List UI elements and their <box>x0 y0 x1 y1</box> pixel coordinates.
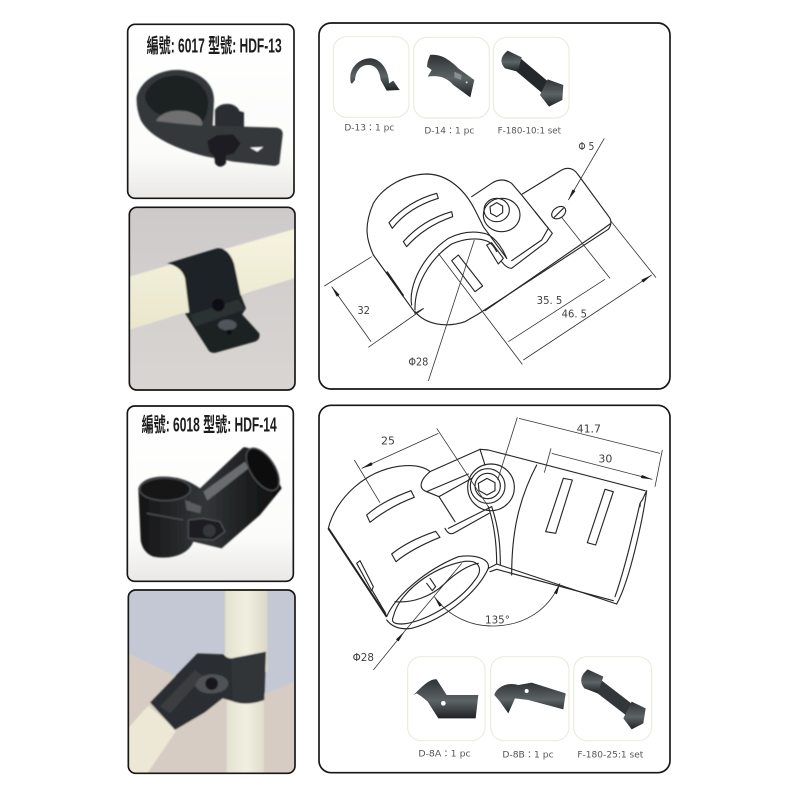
icon: HDF-14 elbow photo <box>138 443 286 558</box>
thumbnail: D-8B part <box>491 657 569 741</box>
dimension: 32: 32 <box>357 305 370 317</box>
panel: HDF-14 technical drawing <box>319 405 670 773</box>
dimension: 30: 30 <box>598 454 612 466</box>
title: HDF-13 model number: 編號: 6017 型號: HDF-13 <box>147 34 282 57</box>
panel: HDF-14 installed on pipes photo <box>125 587 298 777</box>
dimension: 135 degrees: 135° <box>485 614 510 626</box>
dimension: phi 28: Φ28 <box>408 356 428 368</box>
panel: HDF-13 product photo <box>128 24 294 198</box>
icon: HDF-13 clamp photo <box>137 70 283 167</box>
icon: pipes joined by HDF-14 elbow <box>125 587 298 777</box>
dimension: 46.5: 46. 5 <box>562 308 587 320</box>
label: D-13: D-13：1 pc <box>344 124 395 134</box>
panel: HDF-13 installed on pipe photo <box>127 207 297 390</box>
thumbnail: D-8A part <box>408 657 485 741</box>
label: F-180-25: F-180-25:1 set <box>577 751 644 761</box>
dimension: phi 5: Φ 5 <box>578 141 594 153</box>
label: F-180-10: F-180-10:1 set <box>498 126 562 136</box>
label: D-8B: D-8B：1 pc <box>502 751 554 761</box>
panel: HDF-13 technical drawing <box>319 23 670 389</box>
thumbnail: F-180-10 bolt <box>493 37 569 118</box>
dimension: 41.7: 41.7 <box>577 423 601 435</box>
panel: HDF-14 product photo <box>127 406 293 581</box>
dimension: phi 28: Φ28 <box>353 652 374 664</box>
thumbnail: F-180-25 bolt <box>574 657 652 741</box>
title: HDF-14 model number: 編號: 6018 型號: HDF-14 <box>142 414 277 437</box>
thumbnail: D-14 part <box>414 37 489 118</box>
drawing: HDF-14 elbow line art <box>328 417 662 670</box>
dimension: 35.5: 35. 5 <box>537 295 562 307</box>
icon: pipe with HDF-13 clamp <box>127 228 297 353</box>
label: D-14: D-14：1 pc <box>424 126 475 136</box>
label: D-8A: D-8A：1 pc <box>418 750 471 760</box>
thumbnail: D-13 part <box>333 37 409 117</box>
drawing: HDF-13 clamp line art <box>324 138 656 381</box>
dimension: 25: 25 <box>381 436 395 448</box>
